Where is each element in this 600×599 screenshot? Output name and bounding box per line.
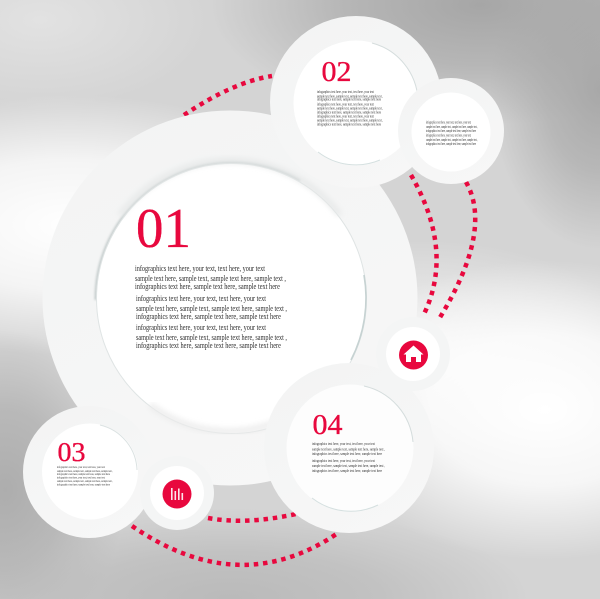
text block: 04 body: infographics text here, sample text here, sample text here xyxy=(312,468,382,474)
text block: 01 body: infographics text here, your text, text here, your text xyxy=(136,322,266,332)
text block: 02 body xyxy=(317,90,383,127)
icon: home xyxy=(399,340,428,370)
panel: 01 main circle xyxy=(42,110,418,486)
text block: 04 body: infographics text here, your text, text here, your text xyxy=(312,441,376,447)
text block: 01 body xyxy=(135,263,287,350)
text block: small circle body: infographics text here, your text, text here, your text xyxy=(426,120,471,126)
heading: 03: 03 xyxy=(58,437,86,467)
text block: 01 body: sample text here, sample text, sample text here, sample text , xyxy=(135,273,286,283)
text block: 01 body: sample text here, sample text, sample text here, sample text , xyxy=(136,332,287,342)
text block: 02 body: infographics text here, sample text here, sample text here xyxy=(317,122,381,127)
dotted connector: long bottom arc xyxy=(132,526,338,565)
text block: 03 body: sample text here, sample text, sample text here, sample text , xyxy=(57,479,113,484)
icon: bar chart xyxy=(162,480,192,508)
text block: 03 body: infographics text here, sample text here, sample text here xyxy=(57,472,110,477)
panel: 03 circle xyxy=(23,406,155,538)
dotted connector: left arc to home xyxy=(411,175,437,314)
panel: 02 circle xyxy=(270,16,442,188)
text block: 04 body xyxy=(312,441,385,474)
text block: 01 body: infographics text here, your text, text here, your text xyxy=(136,293,266,303)
panel: 04 circle xyxy=(264,363,434,533)
text block: 02 body: sample text here, sample text, sample text here, sample text , xyxy=(317,94,383,99)
text block: 02 body: infographics text here, sample text here, sample text here xyxy=(317,98,381,103)
dotted connector: top arc xyxy=(184,76,272,115)
heading: 04: 04 xyxy=(312,410,342,441)
text block: small circle body: infographics text here, sample text here, sample text here xyxy=(426,142,476,147)
heading: 01: 01 xyxy=(136,198,191,260)
dotted connector: right arc to home xyxy=(439,182,475,319)
text block: 02 body: sample text here, sample text, sample text here, sample text , xyxy=(317,107,383,112)
text block: 01 body: infographics text here, sample text here, sample text here xyxy=(136,340,281,350)
panel: chart circle xyxy=(140,456,214,530)
text block: small circle body: sample text here, sample text, sample text here, sample text , xyxy=(426,125,478,130)
text block: 04 body: sample text here, sample text, sample text here, sample text , xyxy=(312,463,385,469)
text block: 02 body: infographics text here, your text, text here, your text xyxy=(317,102,375,107)
dotted connector: short bottom arc xyxy=(208,514,296,521)
text block: 02 body: infographics text here, your text, text here, your text xyxy=(317,90,375,95)
text block: 04 body: infographics text here, sample text here, sample text here xyxy=(312,451,382,457)
panel: small top-right circle xyxy=(398,78,504,184)
text block: 02 body: infographics text here, sample text here, sample text here xyxy=(317,110,381,115)
text block: 03 body: sample text here, sample text, sample text here, sample text , xyxy=(57,469,113,474)
text block: 01 body: infographics text here, sample text here, sample text here xyxy=(136,311,281,321)
text block: 04 body: infographics text here, your text, text here, your text xyxy=(312,458,376,464)
text block: 04 body: sample text here, sample text, sample text here, sample text , xyxy=(312,446,385,452)
text block: 01 body: infographics text here, sample text here, sample text here xyxy=(135,281,280,291)
heading: 02: 02 xyxy=(322,57,352,88)
text block: 03 body: infographics text here, your text, text here, your text xyxy=(57,476,105,480)
text block: 01 body: sample text here, sample text, sample text here, sample text , xyxy=(136,303,287,313)
text block: 02 body: sample text here, sample text, sample text here, sample text , xyxy=(317,119,383,124)
text block: 03 body: infographics text here, your text, text here, your text xyxy=(57,465,105,470)
text block: small circle body: infographics text here, sample text here, sample text here xyxy=(426,129,476,134)
text block: 01 body: infographics text here, your text, text here, your text xyxy=(135,263,265,273)
text block: small circle body: infographics text here, your text, text here, your text xyxy=(426,134,471,138)
text block: small circle body: sample text here, sample text, sample text here, sample text , xyxy=(426,138,478,143)
text block: 02 body: infographics text here, your text, text here, your text xyxy=(317,115,375,120)
text block: 03 body: infographics text here, sample text here, sample text here xyxy=(57,482,110,488)
text block: 03 body xyxy=(57,465,113,488)
text block: small circle body xyxy=(426,120,478,147)
panel: home circle xyxy=(376,317,450,391)
